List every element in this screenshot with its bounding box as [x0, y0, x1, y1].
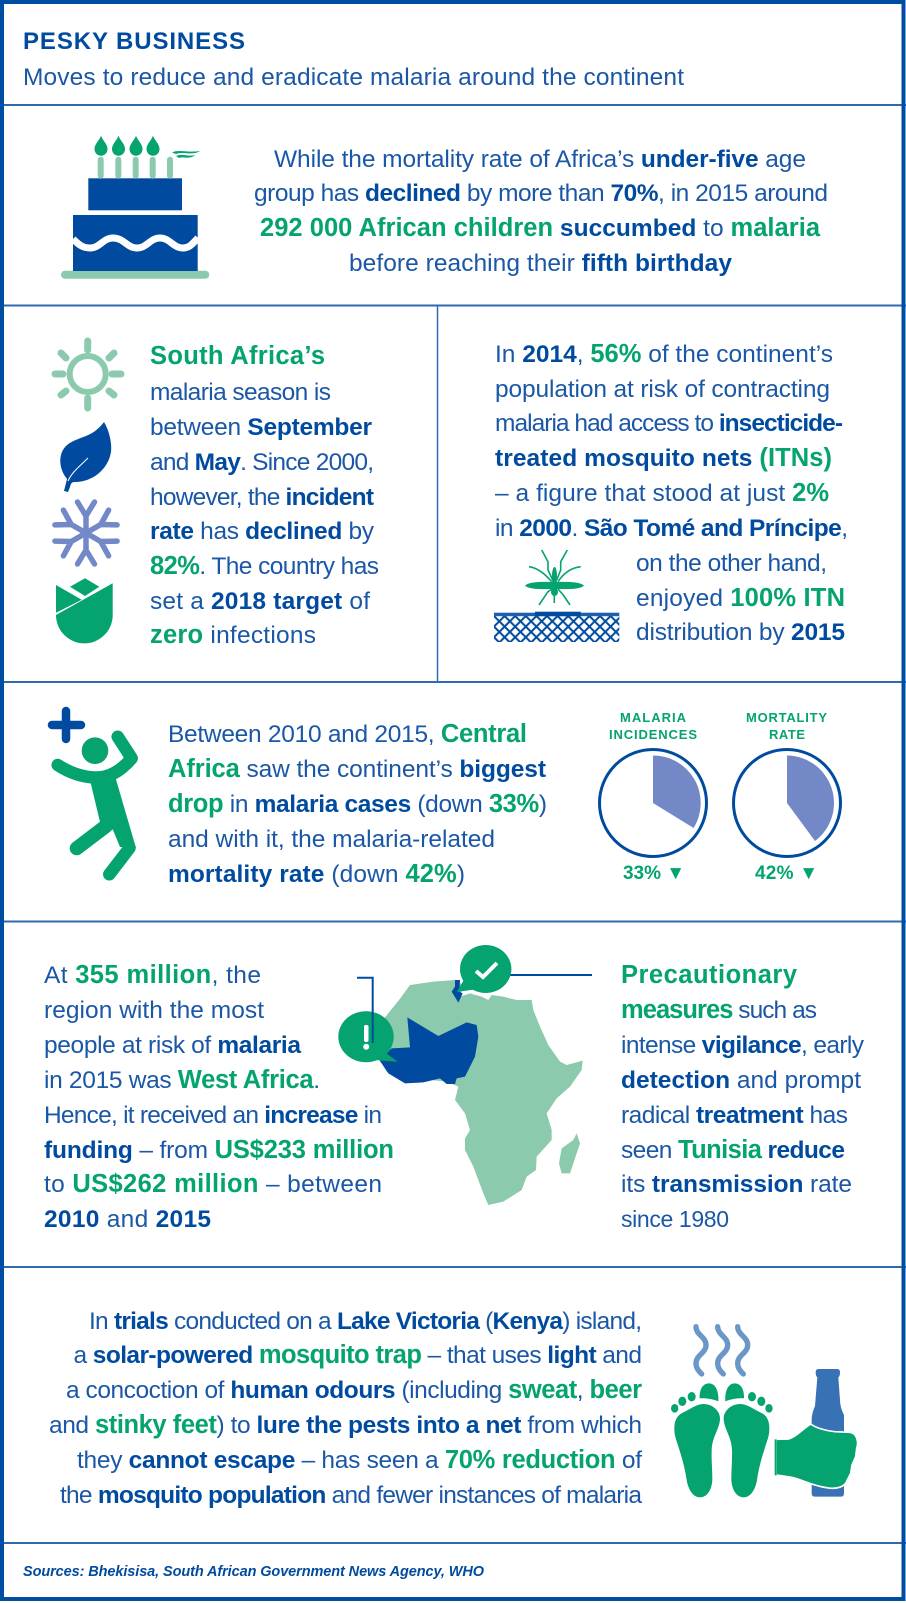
text: trial description: they cannot escape – has seen a 70% reduction of: [77, 1446, 642, 1474]
header: [23, 28, 684, 91]
icon: figure with plus: [52, 711, 136, 874]
icon: tulip: [56, 578, 113, 643]
text: precautionary measures: radical treatment has: [621, 1102, 848, 1129]
text: West Africa funding: Hence, it received an increase in: [44, 1102, 382, 1129]
text: ITN statistics: [495, 340, 848, 646]
panel: insecticide-treated nets: [494, 340, 848, 646]
text: West Africa funding: region with the most: [44, 997, 264, 1024]
text: West Africa funding: people at risk of malaria: [44, 1032, 301, 1059]
text: precautionary measures: seen Tunisia reduce: [621, 1136, 845, 1164]
text: West Africa funding: in 2015 was West Africa.: [44, 1066, 320, 1094]
text: trial description: a solar-powered mosquito trap – that uses light and: [74, 1341, 642, 1369]
text: South Africa: rate has declined by: [150, 518, 375, 545]
text: ITN statistics: population at risk of contracting: [495, 376, 830, 403]
callout: alert bubble: [338, 978, 398, 1062]
subtitle: Moves to reduce and eradicate malaria around the continent: [23, 64, 684, 91]
text: Central Africa: drop in malaria cases (down 33%): [168, 790, 547, 818]
icon: leaf: [60, 422, 111, 492]
text: ITN statistics: In 2014, 56% of the continent’s: [495, 340, 833, 368]
icon: birthday cake: [61, 136, 209, 279]
icon: hand holding beer bottle: [775, 1369, 858, 1497]
text: West Africa funding: funding – from US$233 million: [44, 1136, 394, 1164]
text: South Africa: [150, 342, 379, 649]
text: South Africa: malaria season is: [150, 379, 331, 406]
icon: mosquito over net: [494, 550, 619, 642]
text: Central Africa: Africa saw the continent’s biggest: [168, 755, 546, 783]
text: precautionary measures: detection and prompt: [621, 1067, 861, 1094]
text: mortality statistic: While the mortality rate of Africa’s under-five age: [274, 146, 806, 173]
text: ITN statistics: on the other hand,: [636, 550, 827, 577]
text: trial description: [49, 1308, 642, 1509]
chart: malaria incidences: 33% ▼: [623, 863, 685, 884]
text: trial description: a concoction of human odours (including sweat, beer: [66, 1376, 642, 1404]
panel: Central Africa: [52, 710, 840, 888]
chart: malaria incidences: [600, 710, 706, 884]
text: West Africa funding: 2010 and 2015: [44, 1206, 211, 1233]
text: South Africa: set a 2018 target of: [150, 588, 370, 615]
chart: malaria incidences: MALARIA: [620, 710, 687, 725]
panel: under-five mortality: [61, 136, 828, 279]
text: trial description: and stinky feet) to lure the pests into a net from which: [49, 1411, 642, 1439]
icon: snowflake: [55, 502, 117, 564]
text: mortality statistic: group has declined by more than 70%, in 2015 around: [254, 180, 828, 207]
text: Central Africa: [168, 720, 547, 888]
chart: malaria incidences: INCIDENCES: [609, 727, 697, 742]
text: West Africa funding: At 355 million, the: [44, 961, 261, 989]
text: ITN statistics: in 2000. São Tomé and Príncipe,: [495, 515, 848, 542]
text: trial description: the mosquito population and fewer instances of malaria: [60, 1482, 642, 1509]
panel: South Africa season: [55, 341, 379, 649]
text: Central Africa: mortality rate (down 42%): [168, 860, 465, 888]
text: ITN statistics: treated mosquito nets (ITNs): [495, 444, 832, 472]
icon: stinky feet: [671, 1327, 773, 1497]
sources: Sources: Bhekisisa, South African Government News Agency, WHO: [23, 1564, 485, 1580]
text: precautionary measures: intense vigilance, early: [621, 1032, 865, 1059]
text: precautionary measures: its transmission rate: [621, 1171, 852, 1198]
text: South Africa: South Africa’s: [150, 342, 325, 370]
text: ITN statistics: enjoyed 100% ITN: [636, 584, 845, 612]
callout: check bubble: [457, 945, 592, 993]
text: South Africa: and May. Since 2000,: [150, 449, 374, 476]
text: mortality statistic: 292 000 African children succumbed to malaria: [260, 214, 821, 242]
chart: mortality rate: RATE: [769, 727, 805, 742]
text: precautionary measures: Precautionary: [621, 961, 798, 989]
text: precautionary measures: since 1980: [621, 1206, 729, 1232]
text: South Africa: 82%. The country has: [150, 552, 379, 580]
chart: mortality rate: 42% ▼: [755, 863, 818, 884]
chart: mortality rate: MORTALITY: [746, 710, 827, 725]
text: South Africa: zero infections: [150, 621, 316, 649]
text: West Africa funding: to US$262 million – between: [44, 1170, 382, 1198]
icon: sun: [55, 341, 121, 408]
text: Central Africa: and with it, the malaria-related: [168, 826, 495, 853]
text: Central Africa: Between 2010 and 2015, Central: [168, 720, 527, 748]
text: ITN statistics: malaria had access to insecticide-: [495, 410, 843, 437]
text: South Africa: however, the incident: [150, 484, 374, 511]
text: precautionary measures: [621, 961, 865, 1232]
text: West Africa funding: [44, 961, 394, 1233]
text: mortality statistic: before reaching their fifth birthday: [349, 250, 732, 277]
title: PESKY BUSINESS: [23, 28, 245, 55]
panel: mosquito trap: [49, 1308, 858, 1509]
panel: West Africa and Tunisia: [44, 945, 865, 1233]
text: ITN statistics: – a figure that stood at just 2%: [495, 479, 829, 507]
chart: mortality rate: [734, 710, 840, 884]
map: Africa: [379, 980, 583, 1205]
text: mortality statistic: [254, 146, 828, 277]
text: South Africa: between September: [150, 414, 372, 441]
text: precautionary measures: measures such as: [621, 996, 817, 1024]
text: trial description: In trials conducted on a Lake Victoria (Kenya) island,: [89, 1308, 642, 1335]
text: ITN statistics: distribution by 2015: [636, 619, 845, 646]
